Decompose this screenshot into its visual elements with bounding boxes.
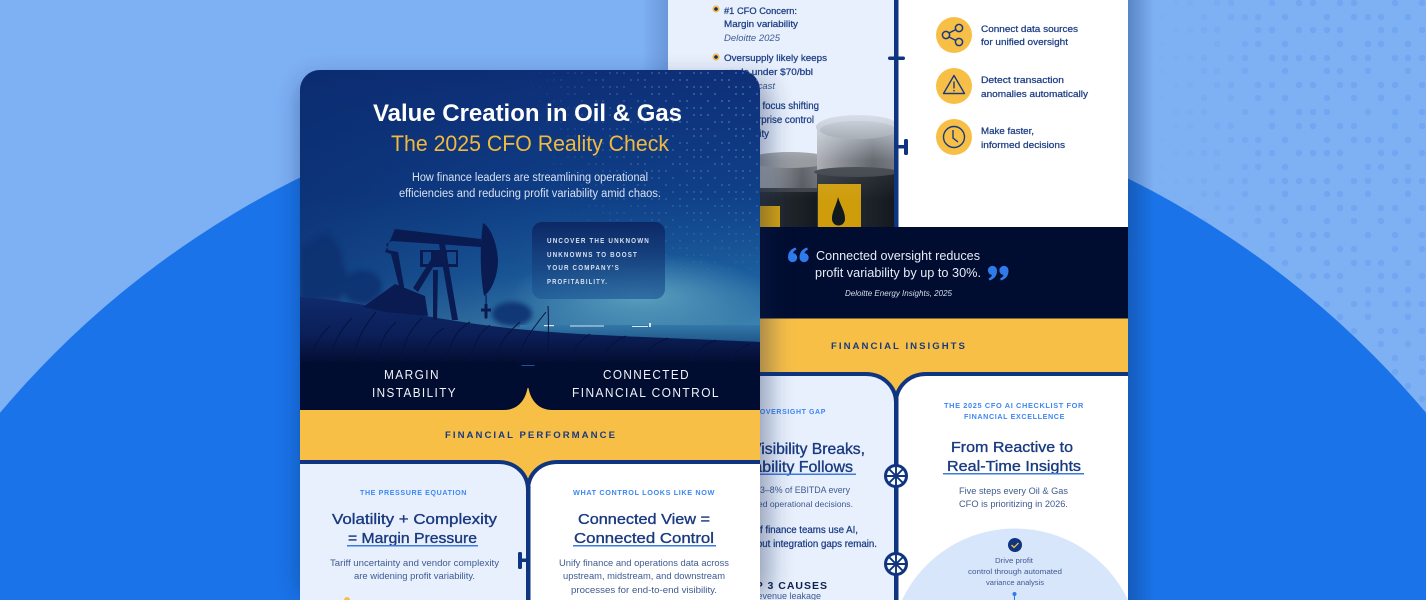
icon: pipe valve wheel 1 xyxy=(886,466,906,486)
panels: oversight gap and checklist xyxy=(668,374,1128,600)
pipeline divider with connectors xyxy=(888,0,908,228)
text: oversight gap: THE OVERSIGHT GAP xyxy=(742,409,826,416)
tab: connected financial control xyxy=(528,362,760,410)
text: oversight gap: year to disconnected operational decisions. xyxy=(688,499,853,509)
bullet 1: #1 CFO Concern: xyxy=(724,6,797,16)
tab: connected financial control: CONNECTED xyxy=(603,368,690,382)
text: oversight gap: TOP 3 CAUSES xyxy=(739,580,828,592)
callout: YOUR COMPANY'S xyxy=(547,265,620,272)
text: oversight gap: Half of finance teams use AI, xyxy=(735,525,858,536)
hero illustration xyxy=(300,70,770,365)
icon: share network xyxy=(936,17,972,53)
heading xyxy=(573,511,716,547)
text: checklist heading: THE 2025 CFO AI CHECKLIST FOR xyxy=(944,403,1084,410)
panel: front infographic card xyxy=(300,70,770,600)
label: faster decisions: Make faster, xyxy=(981,126,1034,136)
panel: back infographic page xyxy=(668,0,1128,600)
section band: financial insights xyxy=(668,318,1128,404)
pumpjack silhouette xyxy=(363,223,498,320)
quote band xyxy=(668,227,1128,318)
icon: opening quote xyxy=(788,248,809,262)
bullet 2: EIA forecast xyxy=(724,81,776,91)
body text: Unify finance and operations data across xyxy=(559,558,730,568)
label: connect data sources xyxy=(981,24,1079,47)
quote text xyxy=(815,248,981,280)
bullet 2: Oversupply likely keeps xyxy=(724,53,828,63)
body text: processes for end-to-end visibility. xyxy=(571,585,717,595)
body text xyxy=(559,558,730,595)
bullet 3: Board focus shifting xyxy=(734,101,819,112)
label: detect anomalies: anomalies automatically xyxy=(981,89,1089,99)
label: faster decisions xyxy=(981,126,1066,150)
text: checklist heading xyxy=(943,403,1084,509)
front card shadow xyxy=(300,78,770,600)
step connector xyxy=(1012,592,1016,600)
tab: margin instability xyxy=(300,362,528,410)
text: checklist heading: Real-Time Insights xyxy=(947,458,1081,475)
checklist circle xyxy=(902,528,1128,600)
intro text xyxy=(399,172,661,200)
bullet 3: to enterprise control xyxy=(728,115,814,126)
bullet 3: visibility xyxy=(736,129,769,140)
body text: Tariff uncertainty and vendor complexity xyxy=(330,558,500,568)
intro text: How finance leaders are streamlining operational xyxy=(412,172,648,184)
text: checklist heading: CFO is prioritizing in 2026. xyxy=(959,499,1068,509)
text: oversight gap: but integration gaps remain. xyxy=(757,539,877,550)
checklist step text: variance analysis xyxy=(986,578,1044,587)
intro text: efficiencies and reducing profit variability amid chaos. xyxy=(399,188,661,200)
label: connect data sources: Connect data sources xyxy=(981,24,1079,34)
heading: = Margin Pressure xyxy=(348,530,477,547)
section band: financial insights: FINANCIAL INSIGHTS xyxy=(831,341,967,352)
image: oil barrels xyxy=(760,115,894,227)
callout: PROFITABILITY. xyxy=(547,279,608,286)
body text xyxy=(330,558,500,581)
icon list: connected control benefits xyxy=(936,17,1089,155)
callout: UNKNOWNS TO BOOST xyxy=(547,252,638,259)
bullet marker xyxy=(344,597,350,600)
quote text: profit variability by up to 30%. xyxy=(815,265,981,280)
heading: Volatility + Complexity xyxy=(332,511,498,528)
label: detect anomalies: Detect transaction xyxy=(981,75,1064,85)
list: market bullets xyxy=(712,5,828,140)
text: oversight gap: When Visibility Breaks, xyxy=(706,441,865,458)
text: oversight gap: Profitability Follows xyxy=(716,459,853,476)
label: WHAT CONTROL LOOKS LIKE NOW xyxy=(573,490,715,497)
section band: financial performance xyxy=(300,388,760,490)
text: oversight gap xyxy=(688,409,877,600)
bullet 1: Margin variability xyxy=(724,19,799,29)
heading xyxy=(332,511,498,547)
bullet 1 xyxy=(712,5,799,43)
heading: Connected Control xyxy=(574,530,714,547)
tab: connected financial control: FINANCIAL CONTROL xyxy=(572,386,720,400)
text: checklist heading: Five steps every Oil & Gas xyxy=(959,486,1068,496)
tab: margin instability: INSTABILITY xyxy=(372,386,457,400)
panel: pressure equation xyxy=(300,462,526,600)
label: connect data sources: for unified oversight xyxy=(981,37,1069,47)
horizon lights xyxy=(544,323,651,327)
subtitle: The 2025 CFO Reality Check xyxy=(391,131,670,156)
tab: margin instability: MARGIN xyxy=(384,368,440,382)
icon: warning triangle xyxy=(936,68,972,104)
body text: are widening profit variability. xyxy=(354,571,475,581)
bullet 3 xyxy=(712,101,819,140)
quote source: Deloitte Energy Insights, 2025 xyxy=(845,289,953,298)
checklist step text xyxy=(968,556,1062,587)
heading: Connected View = xyxy=(578,511,710,528)
trees silhouette xyxy=(300,232,532,326)
icon: closing quote xyxy=(988,266,1009,280)
checklist step text: control through automated xyxy=(968,567,1062,576)
panel: connected control xyxy=(530,462,760,600)
bullet 1: Deloitte 2025 xyxy=(724,33,781,43)
text: oversight gap: Companies lose 3–8% of EBITDA every xyxy=(694,485,851,495)
water xyxy=(520,325,760,342)
text: checklist heading: FINANCIAL EXCELLENCE xyxy=(964,414,1065,421)
label: THE PRESSURE EQUATION xyxy=(360,490,467,497)
icon: check badge xyxy=(1008,538,1022,552)
checklist step text: Drive profit xyxy=(995,556,1034,565)
label: faster decisions: informed decisions xyxy=(981,140,1066,150)
ground xyxy=(300,297,760,365)
pipeline divider with connector xyxy=(300,462,760,600)
tab junction xyxy=(522,366,534,388)
bullet 2 xyxy=(712,53,828,91)
icon: pipe valve wheel 2 xyxy=(886,554,906,574)
quote text: Connected oversight reduces xyxy=(816,248,980,263)
foreground grass xyxy=(310,306,750,364)
bullet 2: crude under $70/bbl xyxy=(724,67,813,77)
body text: upstream, midstream, and downstream xyxy=(563,571,725,581)
label: detect anomalies xyxy=(981,75,1089,99)
callout xyxy=(532,222,665,299)
icon: clock xyxy=(936,119,972,155)
title: Value Creation in Oil & Gas xyxy=(373,100,682,127)
section band: financial performance: FINANCIAL PERFORMANCE xyxy=(445,430,617,441)
callout: UNCOVER THE UNKNOWN xyxy=(547,238,650,245)
text: checklist heading: From Reactive to xyxy=(951,439,1073,456)
